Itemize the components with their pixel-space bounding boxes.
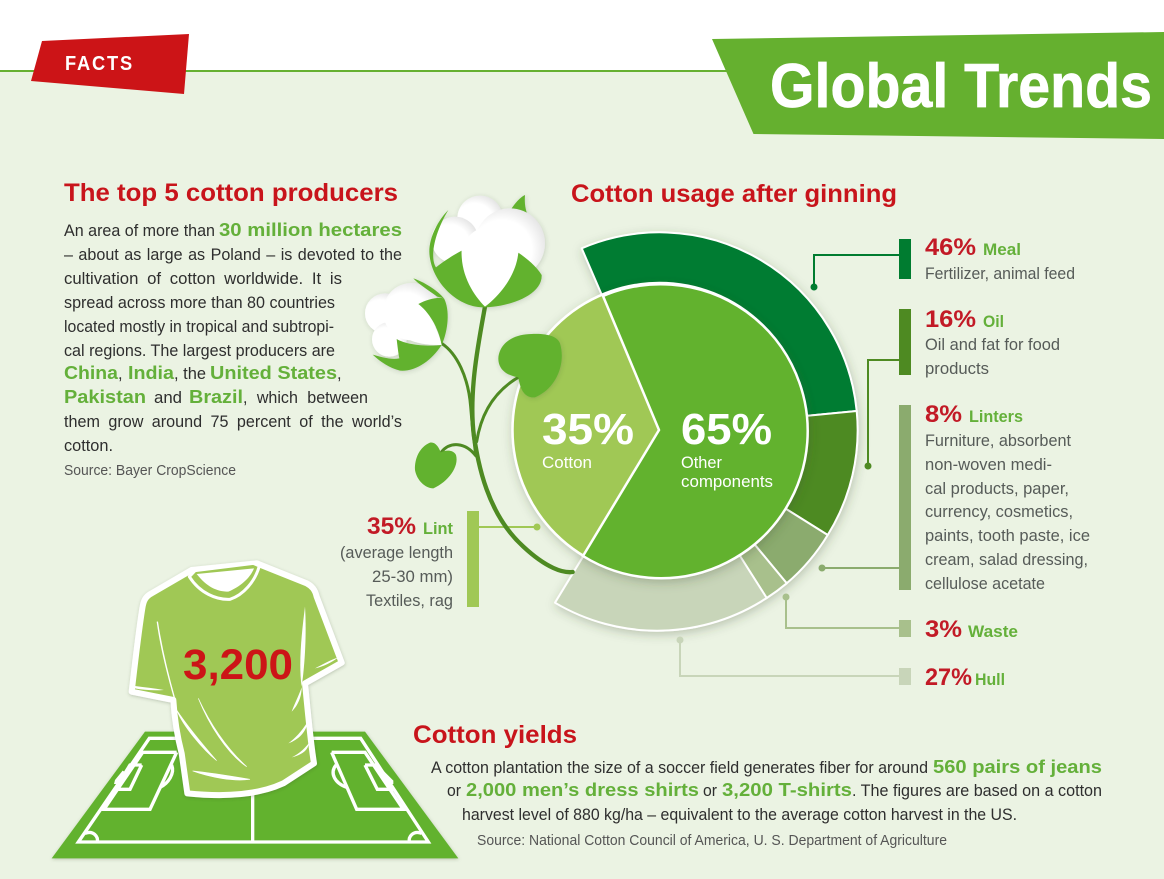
sepal: thin <box>413 278 444 298</box>
legend: hull: Hull <box>975 670 1005 689</box>
text block: producers description: Brazil <box>189 387 243 407</box>
text block: producers description: them grow around 75 percent of the world’s <box>64 413 402 431</box>
t-shirt body <box>132 563 342 795</box>
label: 65% other components: 65% <box>681 405 772 454</box>
legend: linters: non-woven medi- <box>925 455 1052 474</box>
legend: linters: currency, cosmetics, <box>925 502 1073 521</box>
legend: linters <box>818 401 1090 593</box>
heading: cotton yields: Cotton yields <box>413 721 577 749</box>
legend: hull: 27% <box>925 664 972 691</box>
cotton lobes <box>457 196 503 241</box>
tag: FACTS <box>31 34 189 94</box>
connector: linters <box>822 567 899 569</box>
text block: yields description: 3,200 T-shirts <box>722 780 852 800</box>
text block: yields description: . The figures are based on a cotton <box>852 782 1102 800</box>
outer ring <box>555 232 858 631</box>
text block: producers description: , which between <box>243 389 368 407</box>
source: Bayer CropScience: Source: Bayer CropScience <box>64 463 236 479</box>
segment: oil 16% <box>660 411 858 535</box>
connector: hull <box>680 640 899 676</box>
legend: linters: Linters <box>969 407 1023 426</box>
text block: producers description: – about as large as Poland – is devoted to the <box>64 246 402 264</box>
sepal: top right <box>511 195 528 217</box>
header rule <box>0 70 1164 72</box>
legend: linters: paints, tooth paste, ice <box>925 526 1090 545</box>
legend: linters: cal products, paper, <box>925 479 1069 498</box>
text block: yields description: 2,000 men’s dress shirts <box>466 780 699 800</box>
text block: producers description: 30 million hectares <box>219 220 402 240</box>
label: 35% cotton: 35% <box>542 405 634 454</box>
legend: oil: products <box>925 359 989 378</box>
illustration: cotton plant <box>365 195 573 572</box>
segment: meal 46% <box>582 232 857 430</box>
panel: top 5 cotton producers <box>64 179 402 479</box>
small cotton boll <box>365 278 448 371</box>
goal: right <box>379 771 393 784</box>
legend: linters: Furniture, absorbent <box>925 431 1071 450</box>
connector: waste <box>786 597 899 628</box>
panel: cotton yields <box>413 721 1102 849</box>
legend: meal: Fertilizer, animal feed <box>925 264 1075 283</box>
legend: meal: 46% <box>925 234 976 261</box>
front lobe <box>397 306 442 345</box>
legend: oil <box>864 306 1060 470</box>
legend: lint: 25-30 mm) <box>372 567 453 586</box>
number: 3,200: 3,200 <box>183 641 293 689</box>
text block: producers description: China <box>64 363 119 383</box>
text block: producers description: cal regions. The largest producers are <box>64 342 335 360</box>
pitch markings <box>78 738 428 842</box>
text block: producers description: United States <box>210 363 337 383</box>
leaf: upper <box>498 334 562 397</box>
front lobe <box>462 226 518 307</box>
slice: cotton 35% <box>512 283 806 577</box>
text block: producers description <box>64 220 402 455</box>
legend: waste <box>782 594 1018 643</box>
legend: lint: (average length <box>340 543 453 562</box>
illustration: soccer field <box>52 732 458 858</box>
connector: lint <box>467 511 540 607</box>
big cotton boll <box>429 195 545 307</box>
plant stems <box>442 307 573 572</box>
connector: meal <box>814 255 899 287</box>
source: National Cotton Council: Source: National Cotton Council of America, U. S. Department of Agriculture <box>477 833 947 849</box>
inner pie <box>512 283 808 578</box>
text block: producers description: and <box>154 389 182 407</box>
legend: meal: Meal <box>983 240 1021 259</box>
legend: oil: Oil and fat for food <box>925 335 1060 354</box>
shirt folds <box>135 607 338 780</box>
text block: producers description: An area of more than <box>64 222 215 240</box>
text block: producers description: spread across more than 80 countries <box>64 294 335 312</box>
text block: yields description: 560 pairs of jeans <box>933 757 1102 777</box>
title banner: Global Trends <box>712 32 1164 139</box>
legend: linters: 8% <box>925 401 962 428</box>
connector: oil <box>868 360 899 466</box>
slice: other components 65% <box>583 284 808 578</box>
legend: lint: Lint <box>423 519 453 538</box>
heading: cotton usage after ginning: Cotton usage after ginning <box>571 180 897 208</box>
segment: waste 3% <box>660 430 787 598</box>
illustration: t-shirt 3,200 <box>132 563 342 795</box>
legend: linters: cream, salad dressing, <box>925 550 1088 569</box>
text block: producers description: Pakistan <box>64 387 146 407</box>
legend: hull <box>676 636 1005 691</box>
segment: hull 27% <box>555 430 767 631</box>
text block: producers description: , <box>118 365 123 383</box>
legend: oil: 16% <box>925 306 976 333</box>
text block: yields description: A cotton plantation the size of a soccer field generates fiber for around <box>431 759 928 777</box>
text block: producers description: , <box>337 365 342 383</box>
text block: producers description: India <box>128 363 175 383</box>
tag: FACTS: FACTS <box>65 53 134 75</box>
label: 65% other components: components <box>681 473 773 491</box>
collar <box>189 563 259 599</box>
boll husk <box>429 210 542 307</box>
legend: linters: cellulose acetate <box>925 574 1045 593</box>
husk: top <box>418 298 448 345</box>
text block: producers description: located mostly in tropical and subtropi- <box>64 318 334 336</box>
text block: yields description: or <box>447 782 462 800</box>
legend: lint: 35% <box>367 513 416 540</box>
text block: yields description: or <box>703 782 718 800</box>
neck opening <box>197 568 254 592</box>
legend: waste: Waste <box>968 622 1018 641</box>
legend: lint: Textiles, rag <box>366 591 453 610</box>
text block: producers description: , the <box>174 365 206 383</box>
leaf: lower <box>415 443 457 488</box>
goal: left <box>114 771 127 784</box>
text block: yields description: harvest level of 880 kg/ha – equivalent to the average cotton harvest in the US. <box>462 806 1017 824</box>
text block: yields description <box>431 757 1102 824</box>
text block: producers description: cotton. <box>64 437 113 455</box>
label: 65% other components <box>681 405 773 491</box>
segment: linters 8% <box>660 430 828 583</box>
legend: oil: Oil <box>983 312 1004 331</box>
label: 35% cotton: Cotton <box>542 454 592 472</box>
heading: top 5 cotton producers: The top 5 cotton producers <box>64 179 398 207</box>
legend: waste: 3% <box>925 616 962 643</box>
husk: bottom <box>373 339 442 371</box>
white header band <box>0 0 1164 70</box>
text block: producers description: cultivation of cotton worldwide. It is <box>64 270 342 288</box>
label: 65% other components: Other <box>681 454 722 472</box>
chart: cotton usage donut <box>512 232 858 631</box>
legend: meal <box>810 234 1075 290</box>
legend: lint <box>340 513 453 610</box>
